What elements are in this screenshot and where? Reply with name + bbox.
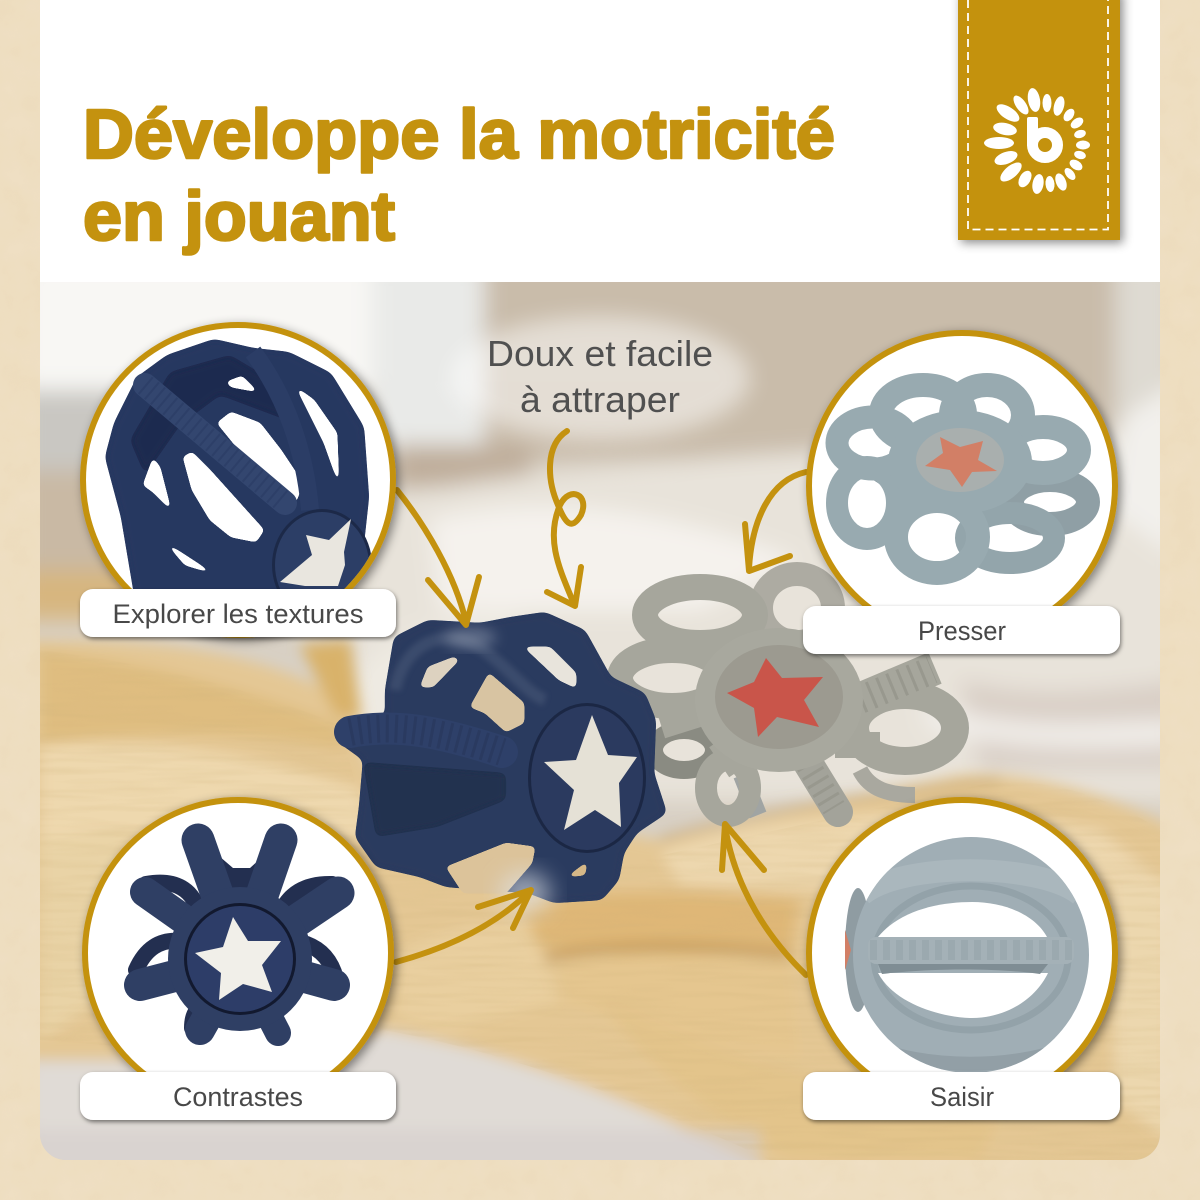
label: explorer — [80, 589, 396, 637]
icon: grey flower — [837, 385, 1088, 573]
background photo — [20, 260, 1180, 1180]
heading text: doux: à attraper — [520, 379, 680, 420]
label: presser — [803, 606, 1120, 654]
circle: explorer les textures — [83, 325, 393, 635]
icon: sun logo — [984, 87, 1090, 195]
flower ribs — [802, 670, 932, 808]
white star — [544, 715, 637, 830]
arrows — [396, 431, 806, 975]
heading text: doux: Doux et facile — [487, 333, 713, 374]
red star — [727, 658, 823, 737]
icon: navy ball — [106, 340, 371, 589]
circle: saisir — [809, 800, 1115, 1106]
title — [83, 95, 835, 255]
disc — [916, 428, 1004, 492]
brand badge — [958, 0, 1120, 240]
icon: grey ball — [845, 837, 1089, 1073]
title: en jouant — [83, 177, 395, 255]
arrow: presser — [745, 472, 806, 571]
star disc — [528, 703, 646, 853]
label: contrastes — [80, 1072, 396, 1120]
text glow — [450, 316, 750, 440]
label: explorer: Explorer les textures — [112, 599, 364, 629]
label: contrastes: Contrastes — [173, 1082, 303, 1112]
back loops — [654, 630, 915, 815]
title: Développe la motricité — [83, 95, 835, 173]
coral star — [925, 437, 997, 487]
arrow: doux — [547, 431, 583, 606]
arrow: explorer — [397, 490, 479, 625]
label: saisir: Saisir — [930, 1082, 994, 1112]
grey flower toy — [620, 574, 955, 816]
white header panel — [40, 0, 1160, 283]
label: saisir — [803, 1072, 1120, 1120]
circle: presser — [809, 333, 1115, 639]
circle: contrastes — [85, 800, 391, 1106]
arrow: saisir — [722, 824, 806, 975]
disc — [715, 645, 843, 749]
textured rib — [350, 729, 502, 752]
label: presser: Presser — [918, 616, 1006, 646]
icon: navy star toy — [136, 840, 338, 1033]
arrow: contrastes — [396, 890, 531, 962]
mustard blanket — [20, 640, 1180, 1180]
heading text: doux — [487, 333, 713, 420]
navy centre toy — [335, 612, 667, 915]
